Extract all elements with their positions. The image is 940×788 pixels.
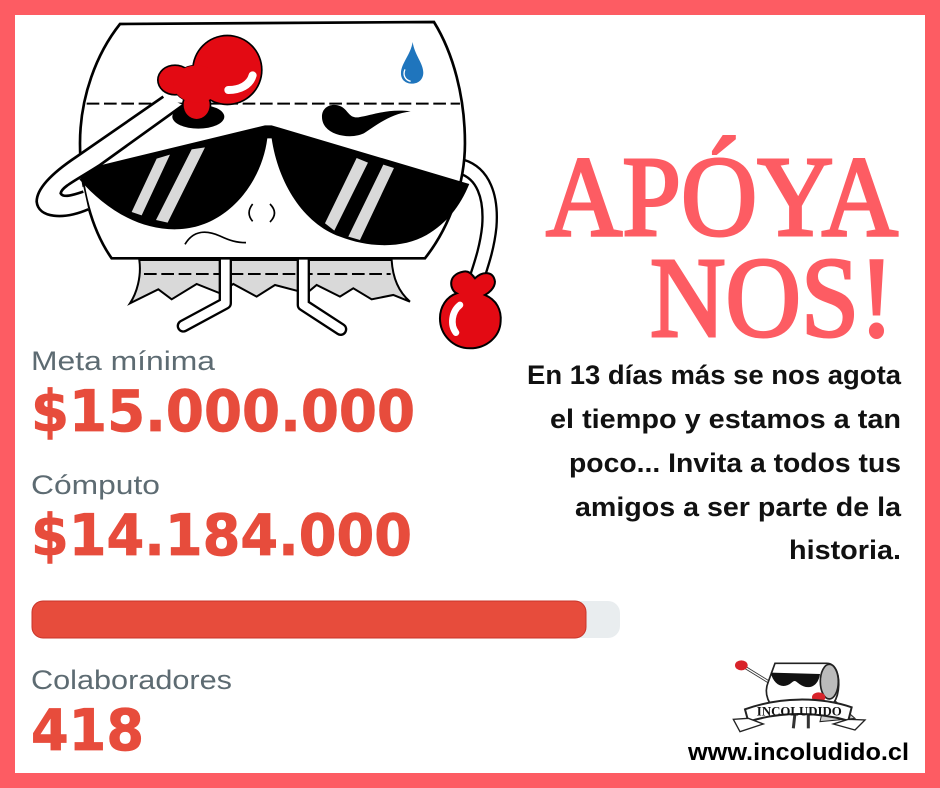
stat: colaboradores xyxy=(31,665,232,764)
stat: meta mínima: $15.000.000 xyxy=(31,379,415,445)
water drop xyxy=(401,42,423,84)
mouth xyxy=(185,232,246,244)
logo: Incoludido xyxy=(733,660,865,732)
stat: colaboradores: 418 xyxy=(31,698,144,764)
message paragraph: En 13 días más se nos agota xyxy=(527,360,902,390)
message paragraph: poco... Invita a todos tus xyxy=(569,448,901,478)
heading: APÓYA NOS! xyxy=(546,133,898,361)
message paragraph xyxy=(527,360,902,565)
raised glove xyxy=(157,35,263,129)
stat: meta mínima: Meta mínima xyxy=(31,346,216,376)
progress bar xyxy=(32,601,620,638)
legs xyxy=(183,260,341,329)
stat: cómputo: Cómputo xyxy=(31,470,160,500)
heading line 1: APÓYA xyxy=(546,133,898,260)
message paragraph: amigos a ser parte de la xyxy=(575,492,902,522)
sunglasses xyxy=(79,125,469,245)
message paragraph: el tiempo y estamos a tan xyxy=(550,404,901,434)
logo glasses xyxy=(771,673,820,687)
roll body xyxy=(80,22,465,258)
logo paper tail xyxy=(820,693,855,722)
message paragraph: historia. xyxy=(789,535,901,565)
paper dashed line xyxy=(144,271,391,277)
logo: Incoludido: INCOLUDIDO xyxy=(757,705,842,719)
saluting arm xyxy=(37,97,183,216)
mascot illustration xyxy=(37,22,501,348)
paper strip xyxy=(130,260,410,303)
eyebrow xyxy=(322,105,411,136)
logo banner xyxy=(745,700,852,722)
nose xyxy=(249,204,274,222)
heading line 2: NOS! xyxy=(650,234,894,361)
stat: colaboradores: Colaboradores xyxy=(31,665,232,695)
logo gloves xyxy=(735,660,748,670)
logo legs xyxy=(793,713,808,728)
body dashed line xyxy=(87,101,460,107)
logo arm xyxy=(745,667,768,682)
website url: www.incoludido.cl xyxy=(687,739,909,766)
right arm xyxy=(462,167,490,277)
lowered glove xyxy=(440,271,501,348)
stat: cómputo xyxy=(31,470,412,569)
stat: meta mínima xyxy=(31,346,415,445)
logo roll xyxy=(766,663,839,713)
stat: cómputo: $14.184.000 xyxy=(31,503,412,569)
